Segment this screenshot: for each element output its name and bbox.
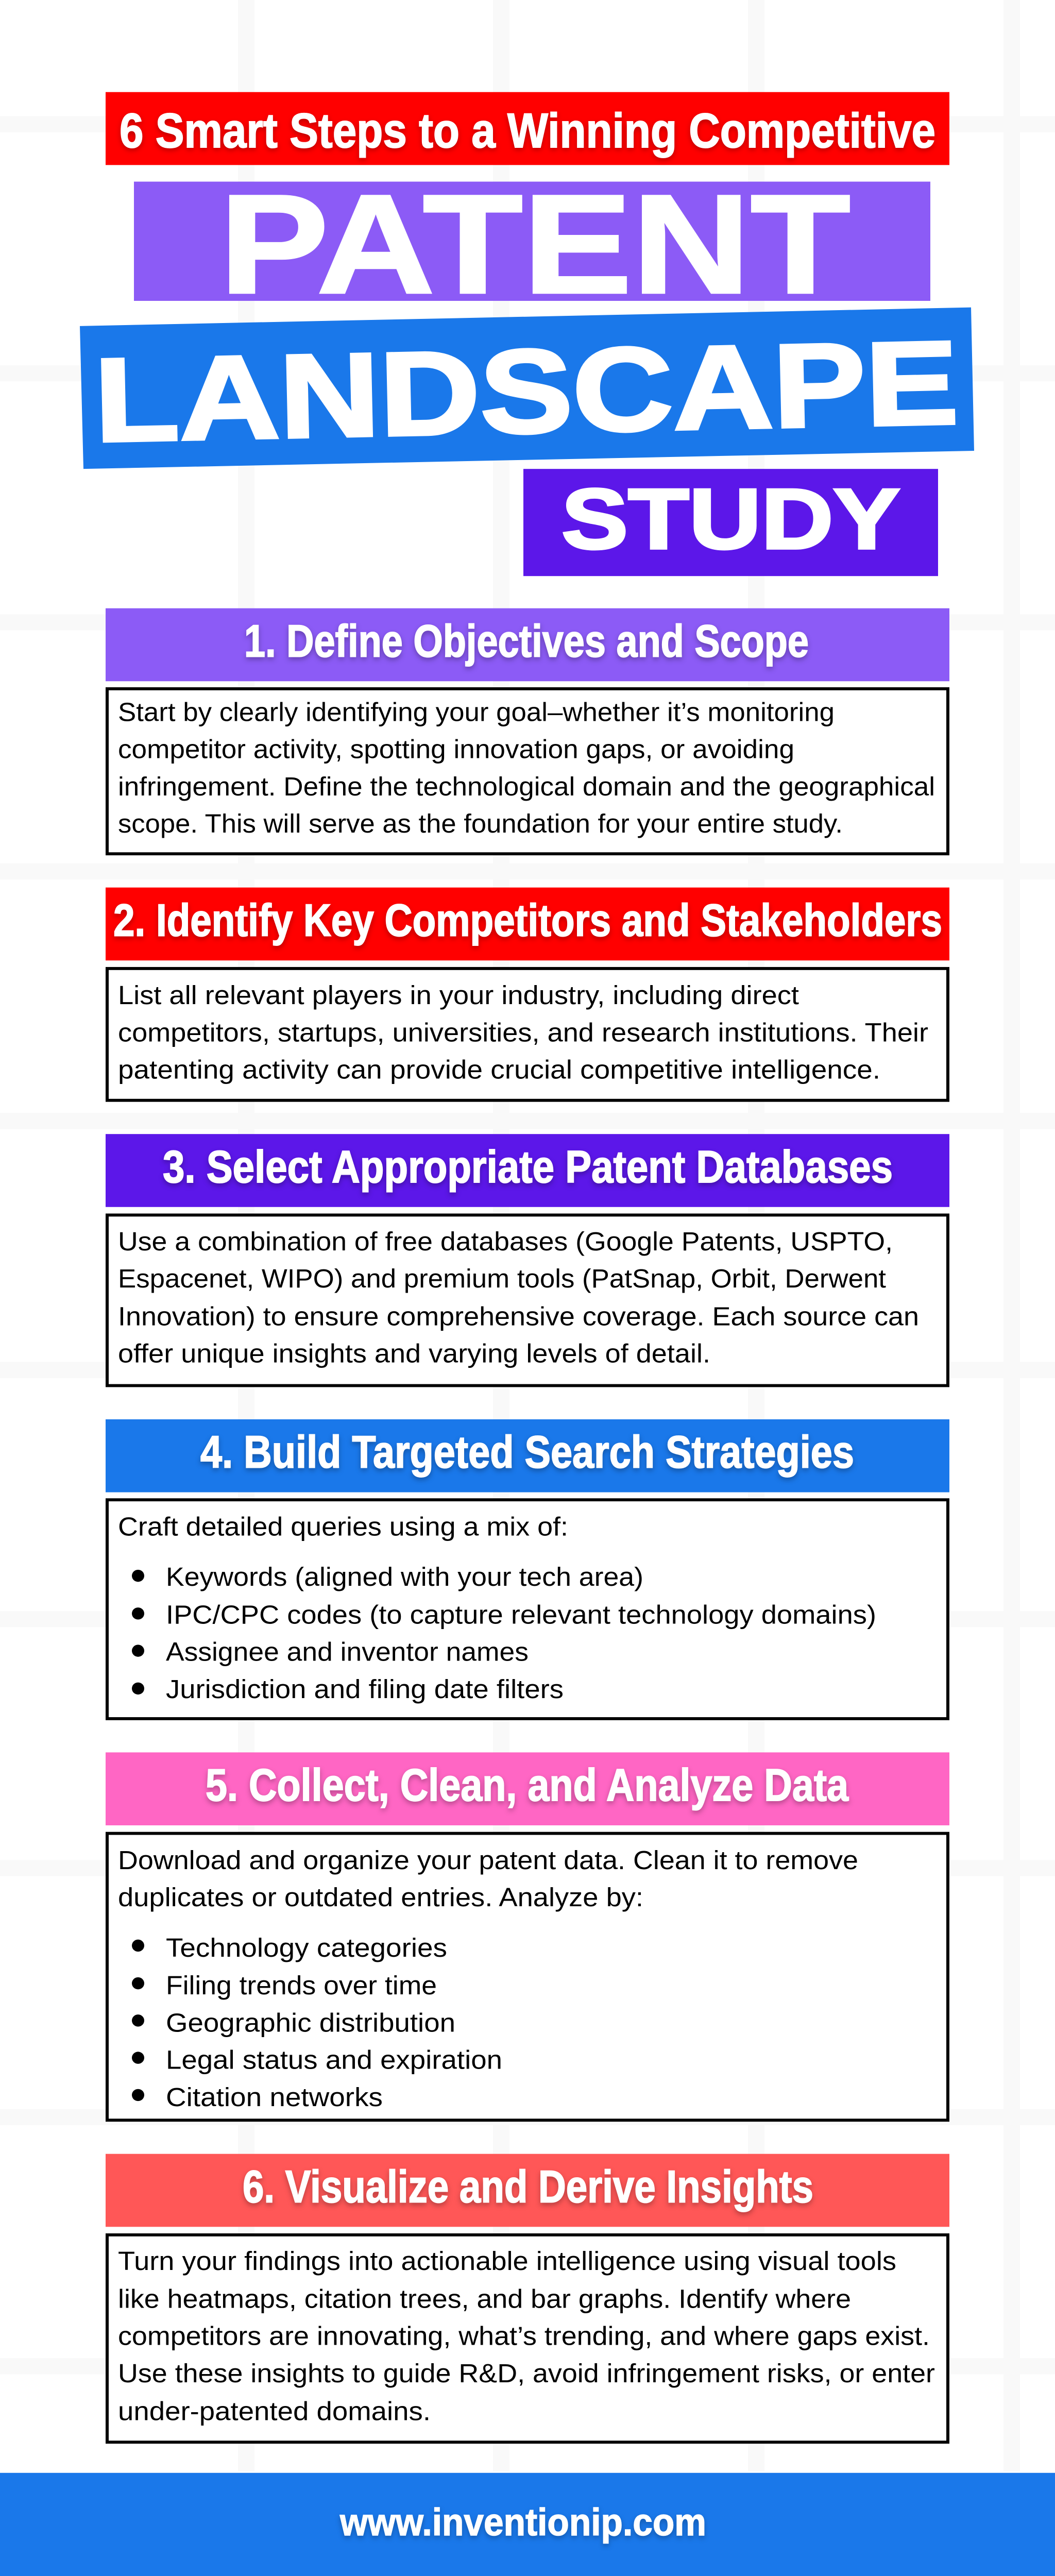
panel: step 3 bbox=[106, 1134, 949, 1385]
panel: step 2 bbox=[106, 888, 949, 1100]
text block: step 6: Use these insights to guide R&D, avoid infringement risks, or enter bbox=[118, 2359, 935, 2388]
panel: step 6 bbox=[106, 2154, 949, 2442]
heading: step 3: 3. Select Appropriate Patent Databases bbox=[163, 1141, 893, 1192]
title: STUDY banner: STUDY bbox=[561, 471, 900, 567]
text block: step 5: duplicates or outdated entries. Analyze by: bbox=[118, 1883, 643, 1912]
text block: step 6: under-patented domains. bbox=[118, 2396, 431, 2426]
bullet list: step 5 bbox=[132, 1933, 502, 2112]
heading: step 1: 1. Define Objectives and Scope bbox=[244, 615, 809, 666]
bullet list: step 5: Filing trends over time bbox=[166, 1971, 437, 2000]
text block: step 4 bbox=[107, 1500, 948, 1719]
heading: step 3 bbox=[106, 1134, 949, 1207]
text block: step 6: competitors are innovating, what’s trending, and where gaps exist. bbox=[118, 2321, 930, 2351]
bullet list: step 5: Citation networks bbox=[166, 2082, 383, 2112]
bullet list: step 5: Technology categories bbox=[166, 1933, 447, 1962]
heading: step 6 bbox=[106, 2154, 949, 2227]
heading: step 6: 6. Visualize and Derive Insights bbox=[243, 2161, 813, 2212]
title: subtitle banner: 6 Smart Steps to a Winning Competitive bbox=[120, 104, 935, 158]
text block: step 3 bbox=[107, 1215, 948, 1385]
heading: step 2 bbox=[106, 888, 949, 960]
heading: step 4 bbox=[106, 1419, 949, 1492]
text block: step 1 bbox=[107, 689, 948, 854]
footer bar with website: www.inventionip.com bbox=[339, 2501, 706, 2544]
title: PATENT banner: PATENT bbox=[219, 165, 850, 323]
panel: step 4 bbox=[106, 1419, 949, 1719]
title: LANDSCAPE tilted banner: LANDSCAPE bbox=[93, 316, 960, 467]
text block: step 1: Start by clearly identifying your goal–whether it’s monitoring bbox=[118, 697, 835, 726]
bullet list: step 5: Legal status and expiration bbox=[166, 2045, 502, 2074]
text block: step 3: Innovation) to ensure comprehensive coverage. Each source can bbox=[118, 1301, 919, 1331]
text block: step 6 bbox=[107, 2235, 948, 2442]
text block: step 2: patenting activity can provide crucial competitive intelligence. bbox=[118, 1055, 880, 1084]
text block: step 2 bbox=[107, 969, 948, 1100]
text block: step 3: Use a combination of free databases (Google Patents, USPTO, bbox=[118, 1226, 893, 1256]
text block: step 1: infringement. Define the technological domain and the geographical bbox=[118, 772, 935, 801]
text block: step 1: competitor activity, spotting innovation gaps, or avoiding bbox=[118, 734, 794, 764]
heading: step 1 bbox=[106, 608, 949, 681]
text block: step 6: Turn your findings into actionable intelligence using visual tools bbox=[118, 2246, 896, 2276]
text block: step 3: offer unique insights and varying levels of detail. bbox=[118, 1338, 710, 1368]
footer bar with website bbox=[0, 2473, 1055, 2576]
text block: step 6: like heatmaps, citation trees, and bar graphs. Identify where bbox=[118, 2284, 851, 2313]
bullet list: step 4: Keywords (aligned with your tech area) bbox=[166, 1562, 643, 1591]
panel: step 1 bbox=[106, 608, 949, 854]
title: subtitle banner bbox=[106, 92, 949, 165]
text block: step 4: Craft detailed queries using a mix of: bbox=[118, 1512, 568, 1541]
bullet list: step 4: Jurisdiction and filing date filters bbox=[166, 1674, 564, 1704]
bullet list: step 5: Geographic distribution bbox=[166, 2008, 455, 2037]
heading: step 5: 5. Collect, Clean, and Analyze Data bbox=[206, 1759, 849, 1810]
text block: step 2: List all relevant players in your industry, including direct bbox=[118, 980, 799, 1010]
title: STUDY banner bbox=[523, 469, 938, 576]
bullet list: step 4: Assignee and inventor names bbox=[166, 1637, 529, 1667]
text block: step 3: Espacenet, WIPO) and premium tools (PatSnap, Orbit, Derwent bbox=[118, 1264, 886, 1293]
text block: step 2: competitors, startups, universities, and research institutions. Their bbox=[118, 1018, 928, 1047]
bullet list: step 4 bbox=[132, 1562, 876, 1704]
title: PATENT banner bbox=[134, 165, 930, 323]
heading: step 4: 4. Build Targeted Search Strategies bbox=[200, 1427, 854, 1477]
text block: step 5 bbox=[107, 1834, 948, 2120]
text block: step 5: Download and organize your patent data. Clean it to remove bbox=[118, 1845, 858, 1875]
text block: step 1: scope. This will serve as the foundation for your entire study. bbox=[118, 809, 843, 838]
bullet list: step 4: IPC/CPC codes (to capture relevant technology domains) bbox=[166, 1600, 876, 1629]
panel: step 5 bbox=[106, 1752, 949, 2120]
heading: step 5 bbox=[106, 1752, 949, 1825]
